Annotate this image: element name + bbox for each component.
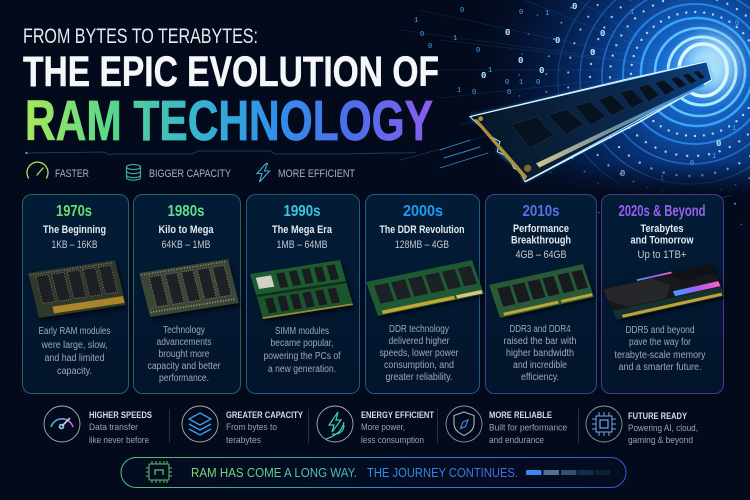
panel: 1990s (246, 194, 360, 394)
panel: 2000s: delivered higher (388, 336, 450, 347)
hero background: data tunnel swirl: 0 (690, 160, 694, 168)
hero background: data tunnel swirl (330, 0, 750, 234)
gradient title line: RAM TECHNOLOGY (25, 89, 433, 153)
feature: greater capacity: terabytes (226, 435, 261, 446)
RAM module image (139, 259, 241, 320)
highlight: faster (27, 162, 89, 180)
panel: 1990s: SIMM modules (275, 326, 329, 337)
header divider (25, 151, 416, 155)
hero background: data tunnel swirl: 0 (519, 9, 523, 17)
panel: 1980s: Technology (163, 325, 205, 336)
panel: 1980s: capacity and better (148, 361, 221, 372)
icon: shield (454, 412, 474, 436)
hero background: data tunnel swirl: 0 (572, 2, 577, 12)
hero background: data tunnel swirl: 0 (539, 66, 544, 76)
panel: 2000s (366, 194, 486, 394)
panel: 2020s and beyond: and Tomorrow (630, 234, 694, 246)
panel: 1990s: The Mega Era (272, 224, 333, 236)
RAM module image (28, 260, 128, 321)
feature: greater capacity: GREATER CAPACITY (226, 410, 304, 421)
progress segments (526, 470, 610, 475)
RAM module image (489, 264, 596, 320)
hero background: data tunnel swirl: 0 (742, 79, 746, 87)
feature: future ready: Powering AI, cloud, (628, 423, 698, 434)
hero background: data tunnel swirl: 0 (590, 48, 595, 58)
panel: 2000s: speeds, lower power (380, 348, 459, 359)
panel: 2000s: 2000s (403, 203, 443, 220)
feature: future ready (586, 406, 698, 446)
hero background: data tunnel swirl: 1 (453, 35, 457, 43)
hero background: data tunnel swirl: 0 (716, 139, 721, 149)
panel: 2020s and beyond: terabyte-scale memory (614, 350, 706, 361)
feature: higher speeds: like never before (89, 435, 149, 446)
panel: 2020s and beyond: Terabytes (640, 223, 684, 235)
panel: 2010s: 2010s (522, 203, 560, 220)
panel: 2020s and beyond: and a smarter future. (618, 362, 702, 373)
panel: 1990s: powering the PCs of (264, 351, 341, 362)
closing banner: THE JOURNEY CONTINUES. (367, 465, 518, 480)
panel: 1980s (134, 194, 241, 394)
hero background: data tunnel swirl: 0 (536, 79, 540, 87)
feature: higher speeds: HIGHER SPEEDS (89, 410, 152, 421)
panel: 2010s: Performance (513, 223, 569, 235)
panel: 1980s: advancements (156, 337, 212, 348)
feature: higher speeds: Data transfer (89, 422, 138, 433)
hero background: data tunnel swirl: 0 (600, 29, 605, 39)
panel: 1970s: Early RAM modules (38, 326, 110, 337)
feature: greater capacity: From bytes to (226, 422, 277, 433)
panel: 2000s: consumption, and (384, 360, 454, 371)
panel: 2000s: 128MB – 4GB (395, 239, 449, 251)
feature: energy efficient: less consumption (361, 435, 424, 446)
closing banner: RAM HAS COME A LONG WAY. (191, 465, 357, 480)
feature: energy efficient: ENERGY EFFICIENT (361, 410, 434, 421)
feature: more reliable: and endurance (489, 435, 544, 446)
highlight: more efficient: MORE EFFICIENT (278, 168, 355, 180)
panel: 1970s: The Beginning (43, 224, 106, 236)
panel: 2020s and beyond: pave the way for (629, 337, 692, 348)
hero RAM module (470, 62, 712, 182)
highlight: bigger capacity: BIGGER CAPACITY (149, 168, 232, 180)
panel: 2020s and beyond (602, 194, 727, 394)
highlight: more efficient (257, 164, 355, 182)
feature: more reliable: MORE RELIABLE (489, 410, 552, 421)
panel: 2010s: and incredible (513, 360, 567, 371)
panel: 1970s: 1KB – 16KB (52, 239, 98, 251)
hero background: data tunnel swirl: 0 (555, 36, 560, 46)
left light streaks by hero module (400, 140, 488, 168)
hero background: data tunnel swirl: 0 (476, 47, 480, 55)
icon: speedometer (51, 418, 73, 428)
panel: 1970s: 1970s (56, 203, 92, 220)
hero background: data tunnel swirl: 1 (414, 17, 418, 25)
panel: 2020s and beyond: DDR5 and beyond (626, 325, 694, 336)
feature: future ready: gaming & beyond (628, 435, 693, 446)
panel: 1980s: performance. (159, 373, 209, 384)
panel: 1990s: 1MB – 64MB (276, 239, 328, 251)
icon: chip (146, 461, 172, 483)
hero background: data tunnel swirl: 0 (420, 31, 424, 39)
hero background: data tunnel swirl: 0 (460, 7, 464, 15)
icon: lightning bolt (257, 164, 270, 182)
hero background: data tunnel swirl: 0 (507, 89, 511, 97)
hero background: data tunnel swirl: 0 (505, 28, 510, 38)
closing banner (121, 458, 626, 488)
hero background: data tunnel swirl: 1 (545, 10, 549, 18)
hero background: data tunnel swirl: 1 (422, 61, 426, 69)
panel: 2000s: The DDR Revolution (380, 224, 465, 236)
panel: 1990s: a new generation. (268, 364, 336, 375)
panel: 2010s (486, 194, 596, 394)
panel: 1980s: 64KB – 1MB (162, 239, 210, 251)
panel: 1970s (22, 194, 128, 394)
hero background: data tunnel swirl: 0 (481, 71, 486, 81)
panel: 1970s: were large, slow, (41, 340, 108, 351)
panel: 1980s: 1980s (168, 203, 204, 220)
panel: 2010s: Breakthrough (511, 234, 571, 246)
panel: 1980s: brought more (158, 349, 210, 360)
highlight: bigger capacity (126, 164, 232, 180)
panel: 1970s: capacity. (57, 366, 92, 377)
icon: layers (189, 413, 211, 435)
feature: energy efficient: More power, (361, 422, 405, 433)
panel: 2020s and beyond: 2020s & Beyond (618, 203, 706, 220)
panel: 2010s: 4GB – 64GB (516, 249, 566, 261)
panel: 2010s: raised the bar with (504, 336, 576, 347)
panel: 2020s and beyond: Up to 1TB+ (638, 249, 686, 261)
hero background: data tunnel swirl: 0 (518, 56, 523, 66)
hero background: data tunnel swirl: 0 (428, 43, 432, 51)
panel: 2010s: DDR3 and DDR4 (510, 324, 571, 335)
feature: energy efficient (317, 406, 434, 446)
hero background: data tunnel swirl: 1 (660, 175, 664, 183)
feature: greater capacity (182, 406, 304, 446)
icon: gauge (27, 162, 48, 178)
hero background: data tunnel swirl: 0 (620, 169, 625, 179)
panel: 1990s: 1990s (284, 203, 320, 220)
feature: more reliable (446, 406, 567, 446)
icon: processor (592, 412, 616, 436)
icon: database (126, 164, 140, 180)
RAM module image (250, 260, 355, 322)
panel: 2010s: higher bandwidth (506, 348, 574, 359)
panel: 2000s: DDR technology (389, 324, 449, 335)
panel: 1980s: Kilo to Mega (158, 224, 214, 236)
panel: 1970s: and had limited (44, 353, 104, 364)
panel: 2000s: greater reliability. (386, 372, 452, 383)
main title line: THE EPIC EVOLUTION OF (23, 48, 439, 96)
panel: 2010s: efficiency. (521, 372, 559, 383)
RAM module image (602, 263, 727, 322)
header subtitle: FROM BYTES TO TERABYTES: (23, 25, 258, 48)
feature: more reliable: Built for performance (489, 422, 567, 434)
hero background: data tunnel swirl: 0 (735, 20, 739, 28)
hero background: data tunnel swirl: 1 (630, 9, 634, 17)
icon: bolt and leaf (326, 412, 344, 439)
hero chips (512, 71, 705, 148)
hero background: data tunnel swirl: 1 (457, 87, 461, 95)
hero background: data tunnel swirl: 0 (472, 89, 476, 97)
feature: future ready: FUTURE READY (628, 411, 688, 422)
hero background: data tunnel swirl: 1 (712, 153, 716, 161)
panel: 1990s: became popular, (270, 338, 334, 349)
hero background: data tunnel swirl: 0 (505, 79, 509, 87)
hero background: data tunnel swirl: 1 (519, 79, 523, 87)
hero background: data tunnel swirl: 1 (732, 125, 736, 133)
highlight: faster: FASTER (55, 168, 89, 180)
hero background: data tunnel swirl: 1 (488, 67, 492, 75)
feature: higher speeds (44, 406, 152, 446)
RAM module image (366, 260, 486, 319)
